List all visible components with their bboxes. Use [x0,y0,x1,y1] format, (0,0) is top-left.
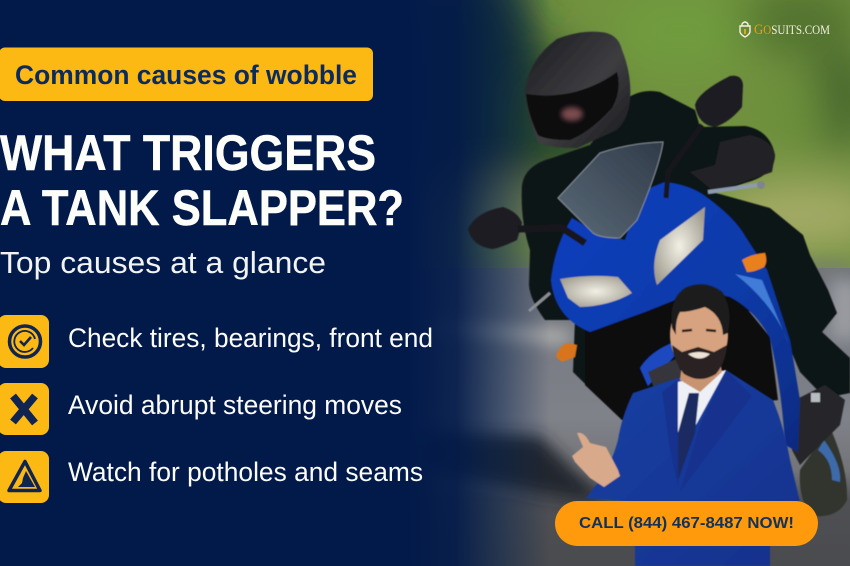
lapels [662,370,752,492]
chrome fork joint [811,393,820,402]
right mirror stalk [666,125,702,198]
rear tire [800,432,847,516]
head [670,297,728,373]
suit jacket [586,370,800,566]
radiator opening lip [640,343,678,386]
heading: WHAT TRIGGERS [0,125,376,181]
lawyer portrait [572,284,800,566]
neck [680,360,722,392]
lock icon [740,22,750,37]
photo background: blurred greenery and road [400,0,850,566]
right mirror [695,76,743,127]
logo wordmark: GOSUITS.COM [754,22,830,38]
item: check tires [0,315,433,368]
item text: Check tires, bearings, front end [68,323,433,353]
front fairing [551,182,800,452]
left headlight [560,276,632,307]
fairing highlight [735,274,789,345]
icon: crossed bars [0,383,49,435]
brake lever [708,185,758,192]
shirt collar [677,370,726,457]
smile [688,352,710,358]
pointing hand [572,433,620,487]
heading [0,125,404,236]
lower black fairing [585,282,778,420]
heading: A TANK SLAPPER? [0,180,404,236]
motorcycle and rider photo [468,32,850,516]
rider body [522,91,850,420]
subtitle: Top causes at a glance [0,245,326,280]
windscreen [558,142,663,238]
left lever [529,293,550,311]
call to action button [555,501,818,546]
badge label: Common causes of wobble [15,60,357,90]
navy fade panel [0,0,550,566]
item text: Watch for potholes and seams [68,457,423,487]
icon: warning triangle [0,451,49,503]
visor reflection [561,107,583,121]
necktie [676,393,699,480]
lever tip [757,181,765,189]
left indicator [556,343,577,362]
right headlight [654,207,705,285]
beard [672,345,727,379]
left mirror [468,207,522,249]
glove [690,135,775,190]
helmet visor [526,72,619,140]
right indicator [742,253,766,272]
helmet [525,32,630,148]
hair [671,284,730,335]
item: potholes [0,451,423,503]
radiator grille [648,358,682,388]
logo: GoSuits.com [740,22,830,38]
fork and brake detail [792,385,845,465]
left mirror stalk [518,228,585,243]
button label: CALL (844) 467-8487 NOW! [579,515,794,532]
icon: check badge [0,315,49,368]
badge: common causes [0,48,373,101]
eyes [682,330,716,331]
item: steering [0,383,402,435]
item text: Avoid abrupt steering moves [68,390,402,420]
